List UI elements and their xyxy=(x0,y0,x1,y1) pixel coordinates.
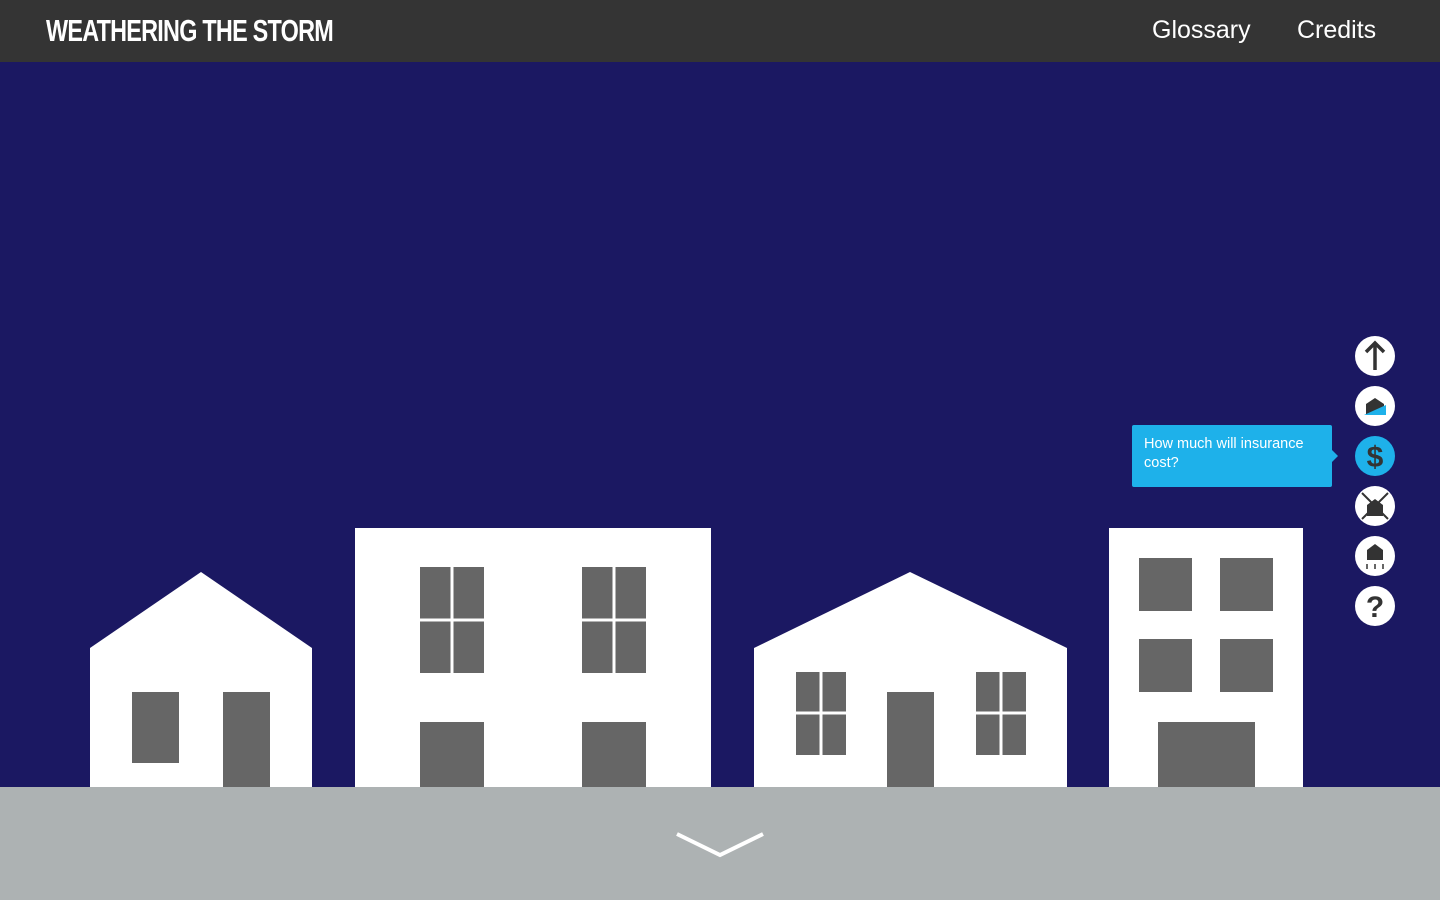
header bar xyxy=(0,0,1440,62)
house 1 xyxy=(90,572,312,787)
icon: dollar xyxy=(1355,436,1395,476)
tooltip: How much will insurance cost? xyxy=(1144,436,1304,471)
ground xyxy=(0,787,1440,900)
house 3 xyxy=(754,572,1067,787)
nav: credits: Credits xyxy=(1297,16,1376,44)
nav: glossary: Glossary xyxy=(1152,16,1251,44)
tooltip xyxy=(1132,425,1332,487)
icon: scroll down chevron xyxy=(677,834,763,855)
icon: house elevated xyxy=(1355,536,1395,576)
title: WEATHERING THE STORM xyxy=(46,13,333,48)
tooltip arrow xyxy=(1332,450,1338,462)
icon: question: ? xyxy=(1366,591,1384,624)
building 2 xyxy=(355,528,711,787)
icon: dollar: $ xyxy=(1367,441,1384,474)
side nav icons xyxy=(1355,336,1395,626)
icon: up arrow xyxy=(1355,336,1395,376)
icon: question xyxy=(1355,586,1395,626)
icon: house rising xyxy=(1355,386,1395,426)
building 4 xyxy=(1109,528,1303,787)
icon: house crossed xyxy=(1355,486,1395,526)
